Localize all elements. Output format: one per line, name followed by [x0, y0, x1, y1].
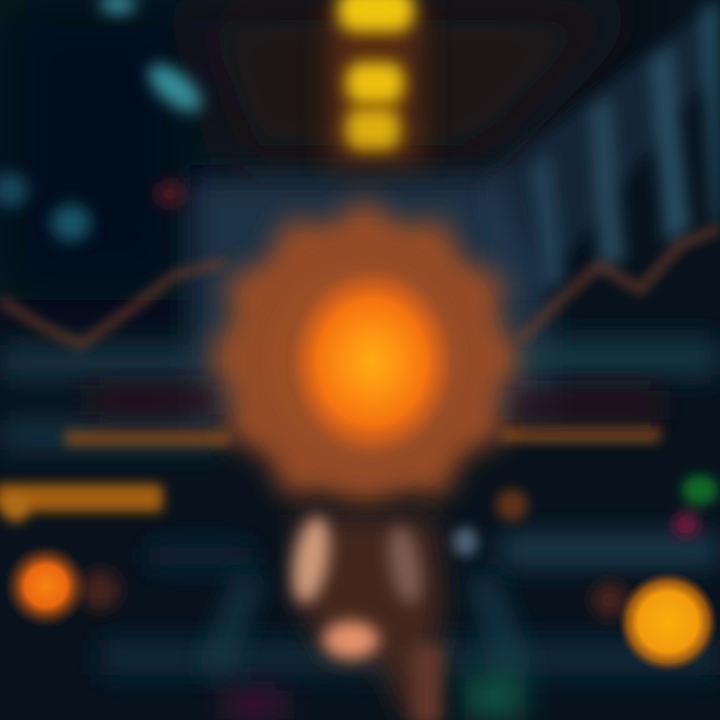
small indicators right — [452, 475, 718, 557]
trend line right — [520, 228, 720, 340]
gear ring — [253, 248, 477, 472]
bottom teal strut — [203, 575, 262, 670]
trend line left — [0, 262, 225, 345]
gear glowing core — [288, 266, 456, 458]
orange orb left — [4, 544, 120, 628]
horizontal orange dashes — [65, 426, 660, 446]
orange indicator — [496, 489, 528, 521]
left pale shape — [287, 514, 335, 606]
blue indicator — [452, 527, 478, 557]
pink indicator — [672, 512, 700, 538]
blue grey middle band — [0, 178, 720, 675]
right pale shape — [383, 523, 427, 607]
particle large — [141, 56, 209, 120]
figure body glow — [295, 515, 445, 720]
bottom accents — [203, 575, 527, 720]
figure below gear — [287, 514, 445, 720]
top ceiling panel — [0, 0, 640, 300]
teal particles — [0, 0, 209, 242]
right slanted stripes — [480, 0, 720, 290]
gear icon — [212, 204, 518, 502]
lower yellow light — [346, 108, 400, 150]
lower pale shape — [323, 621, 379, 659]
red particle — [156, 181, 184, 207]
yellow orb right — [592, 572, 718, 672]
green indicator — [682, 475, 718, 505]
yellow lights column — [328, 0, 422, 165]
light glow — [328, 0, 422, 165]
particle top — [100, 0, 136, 14]
middle yellow light — [346, 62, 404, 104]
bottom teal strut right — [470, 575, 527, 670]
bottom green glow — [465, 675, 525, 720]
orange bar left — [0, 484, 163, 522]
gear teeth — [212, 204, 518, 502]
dark red shadows near gear — [90, 385, 660, 420]
particle low — [51, 204, 91, 242]
particle left — [0, 173, 28, 207]
top yellow light — [338, 0, 414, 32]
bottom pink glow — [225, 690, 285, 720]
lower stem — [412, 645, 442, 720]
